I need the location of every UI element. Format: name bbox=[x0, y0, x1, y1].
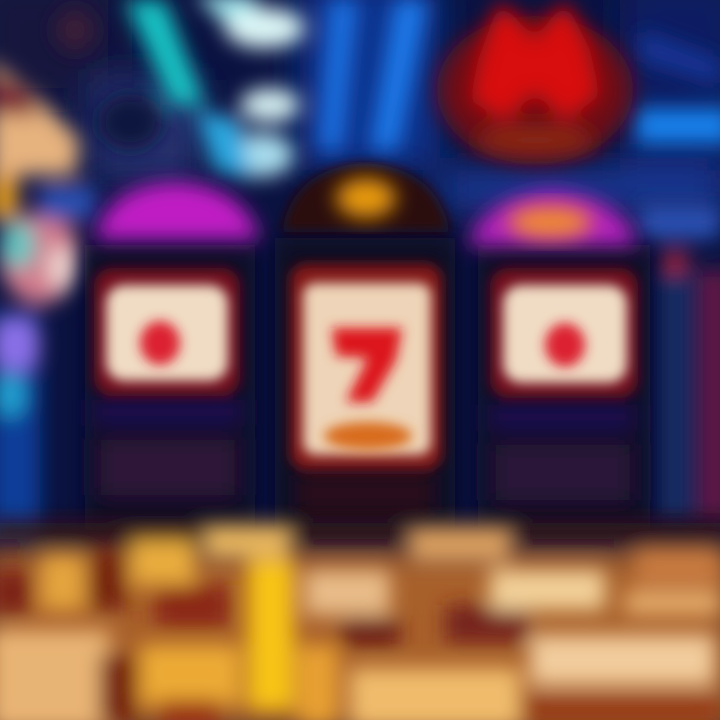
slot machine: right bbox=[468, 190, 650, 530]
cabinet bbox=[275, 238, 455, 530]
slot machine: centre bbox=[275, 163, 455, 530]
left wall: peach panel and colourful lights bbox=[0, 60, 95, 540]
cabinet bbox=[85, 245, 255, 530]
right side: lever and neighbouring machine bbox=[640, 205, 720, 520]
reel symbol bbox=[545, 323, 585, 367]
topper: magenta with orange bbox=[468, 190, 638, 246]
screen frame bbox=[290, 264, 442, 470]
screen frame bbox=[94, 268, 240, 396]
foreground: gold coins and chips bbox=[0, 522, 720, 720]
screen bbox=[106, 285, 228, 381]
neon sign: red emblem bbox=[437, 0, 633, 164]
screen frame bbox=[490, 268, 638, 398]
reel symbol bbox=[140, 321, 180, 365]
payline glow bbox=[324, 422, 412, 450]
screen bbox=[503, 285, 627, 383]
cabinet bbox=[478, 245, 650, 530]
topper: dark dome with gold light bbox=[282, 163, 450, 232]
lucky seven bbox=[332, 328, 402, 402]
slot machine: left bbox=[85, 182, 260, 530]
topper: magenta bbox=[95, 182, 260, 240]
screen bbox=[303, 283, 431, 455]
neon lights: cyan and blue streaks bbox=[55, 0, 720, 180]
